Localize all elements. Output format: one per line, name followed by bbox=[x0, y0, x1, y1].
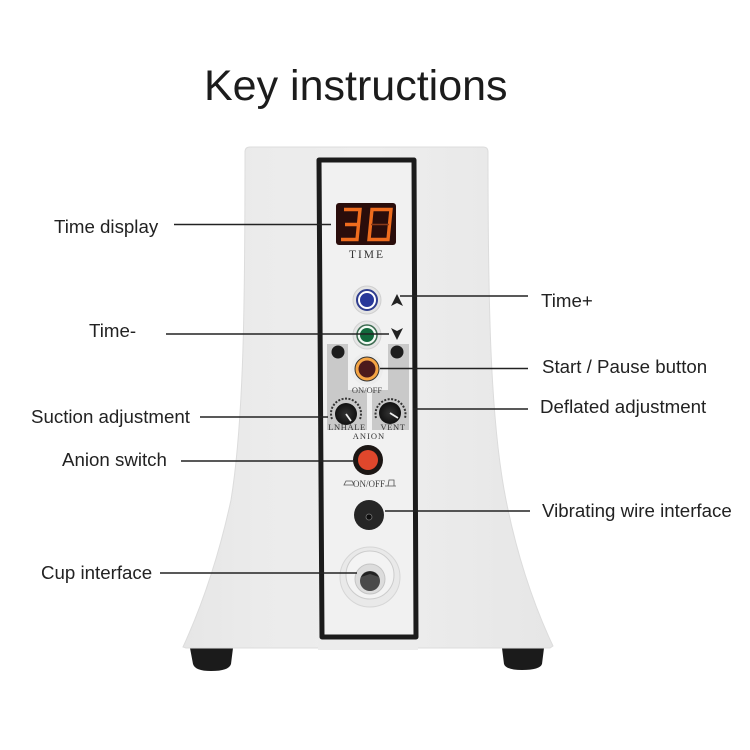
button: start pause (orange) bbox=[351, 353, 383, 395]
label: cup interface: Cup interface bbox=[41, 562, 152, 583]
cup interface bbox=[340, 547, 400, 607]
leader line: vibrating wire bbox=[385, 510, 530, 512]
device body bbox=[183, 147, 553, 648]
label: time minus: Time- bbox=[89, 320, 136, 341]
knob: inhale: LNHALE bbox=[328, 422, 366, 432]
button: start pause (orange): ON/OFF bbox=[352, 385, 382, 395]
title: Key instructions bbox=[204, 62, 508, 110]
label: vibrating wire: Vibrating wire interface bbox=[542, 500, 732, 521]
dark dots bbox=[332, 346, 404, 358]
leader line: time minus bbox=[166, 333, 389, 335]
label: time plus: Time+ bbox=[541, 290, 593, 311]
control panel strip bbox=[318, 160, 418, 650]
timer display: TIME bbox=[349, 249, 385, 261]
anion switch: ON/OFF bbox=[353, 479, 385, 489]
leader line: anion bbox=[181, 460, 354, 462]
arrow icon: up bbox=[391, 294, 403, 306]
anion switch bbox=[344, 445, 396, 489]
grey control background bbox=[327, 344, 409, 430]
anion label: ANION bbox=[353, 431, 385, 441]
label: start pause: Start / Pause button bbox=[542, 356, 707, 377]
foot: right bbox=[502, 648, 544, 670]
button: time minus (green) bbox=[353, 321, 381, 349]
leader line: suction bbox=[200, 416, 328, 418]
leader line: time plus bbox=[400, 295, 528, 297]
leader line: time display bbox=[174, 224, 331, 226]
knob: vent bbox=[376, 399, 406, 432]
foot: left bbox=[190, 648, 233, 671]
leader line: deflated bbox=[413, 408, 528, 410]
label: time display: Time display bbox=[54, 216, 159, 237]
device illustration bbox=[183, 147, 553, 671]
button: time plus (blue) bbox=[353, 286, 381, 314]
leader line: start pause bbox=[380, 368, 528, 370]
timer display bbox=[336, 203, 396, 261]
arrow icon: down bbox=[391, 328, 403, 340]
knob: inhale bbox=[328, 399, 366, 432]
label: deflated adjustment: Deflated adjustment bbox=[540, 396, 707, 417]
knob: vent: VENT bbox=[380, 422, 406, 432]
leader line: cup bbox=[160, 572, 357, 574]
label: anion switch: Anion switch bbox=[62, 449, 167, 470]
vibrating wire jack bbox=[354, 500, 384, 530]
label: suction adjustment: Suction adjustment bbox=[31, 406, 191, 427]
